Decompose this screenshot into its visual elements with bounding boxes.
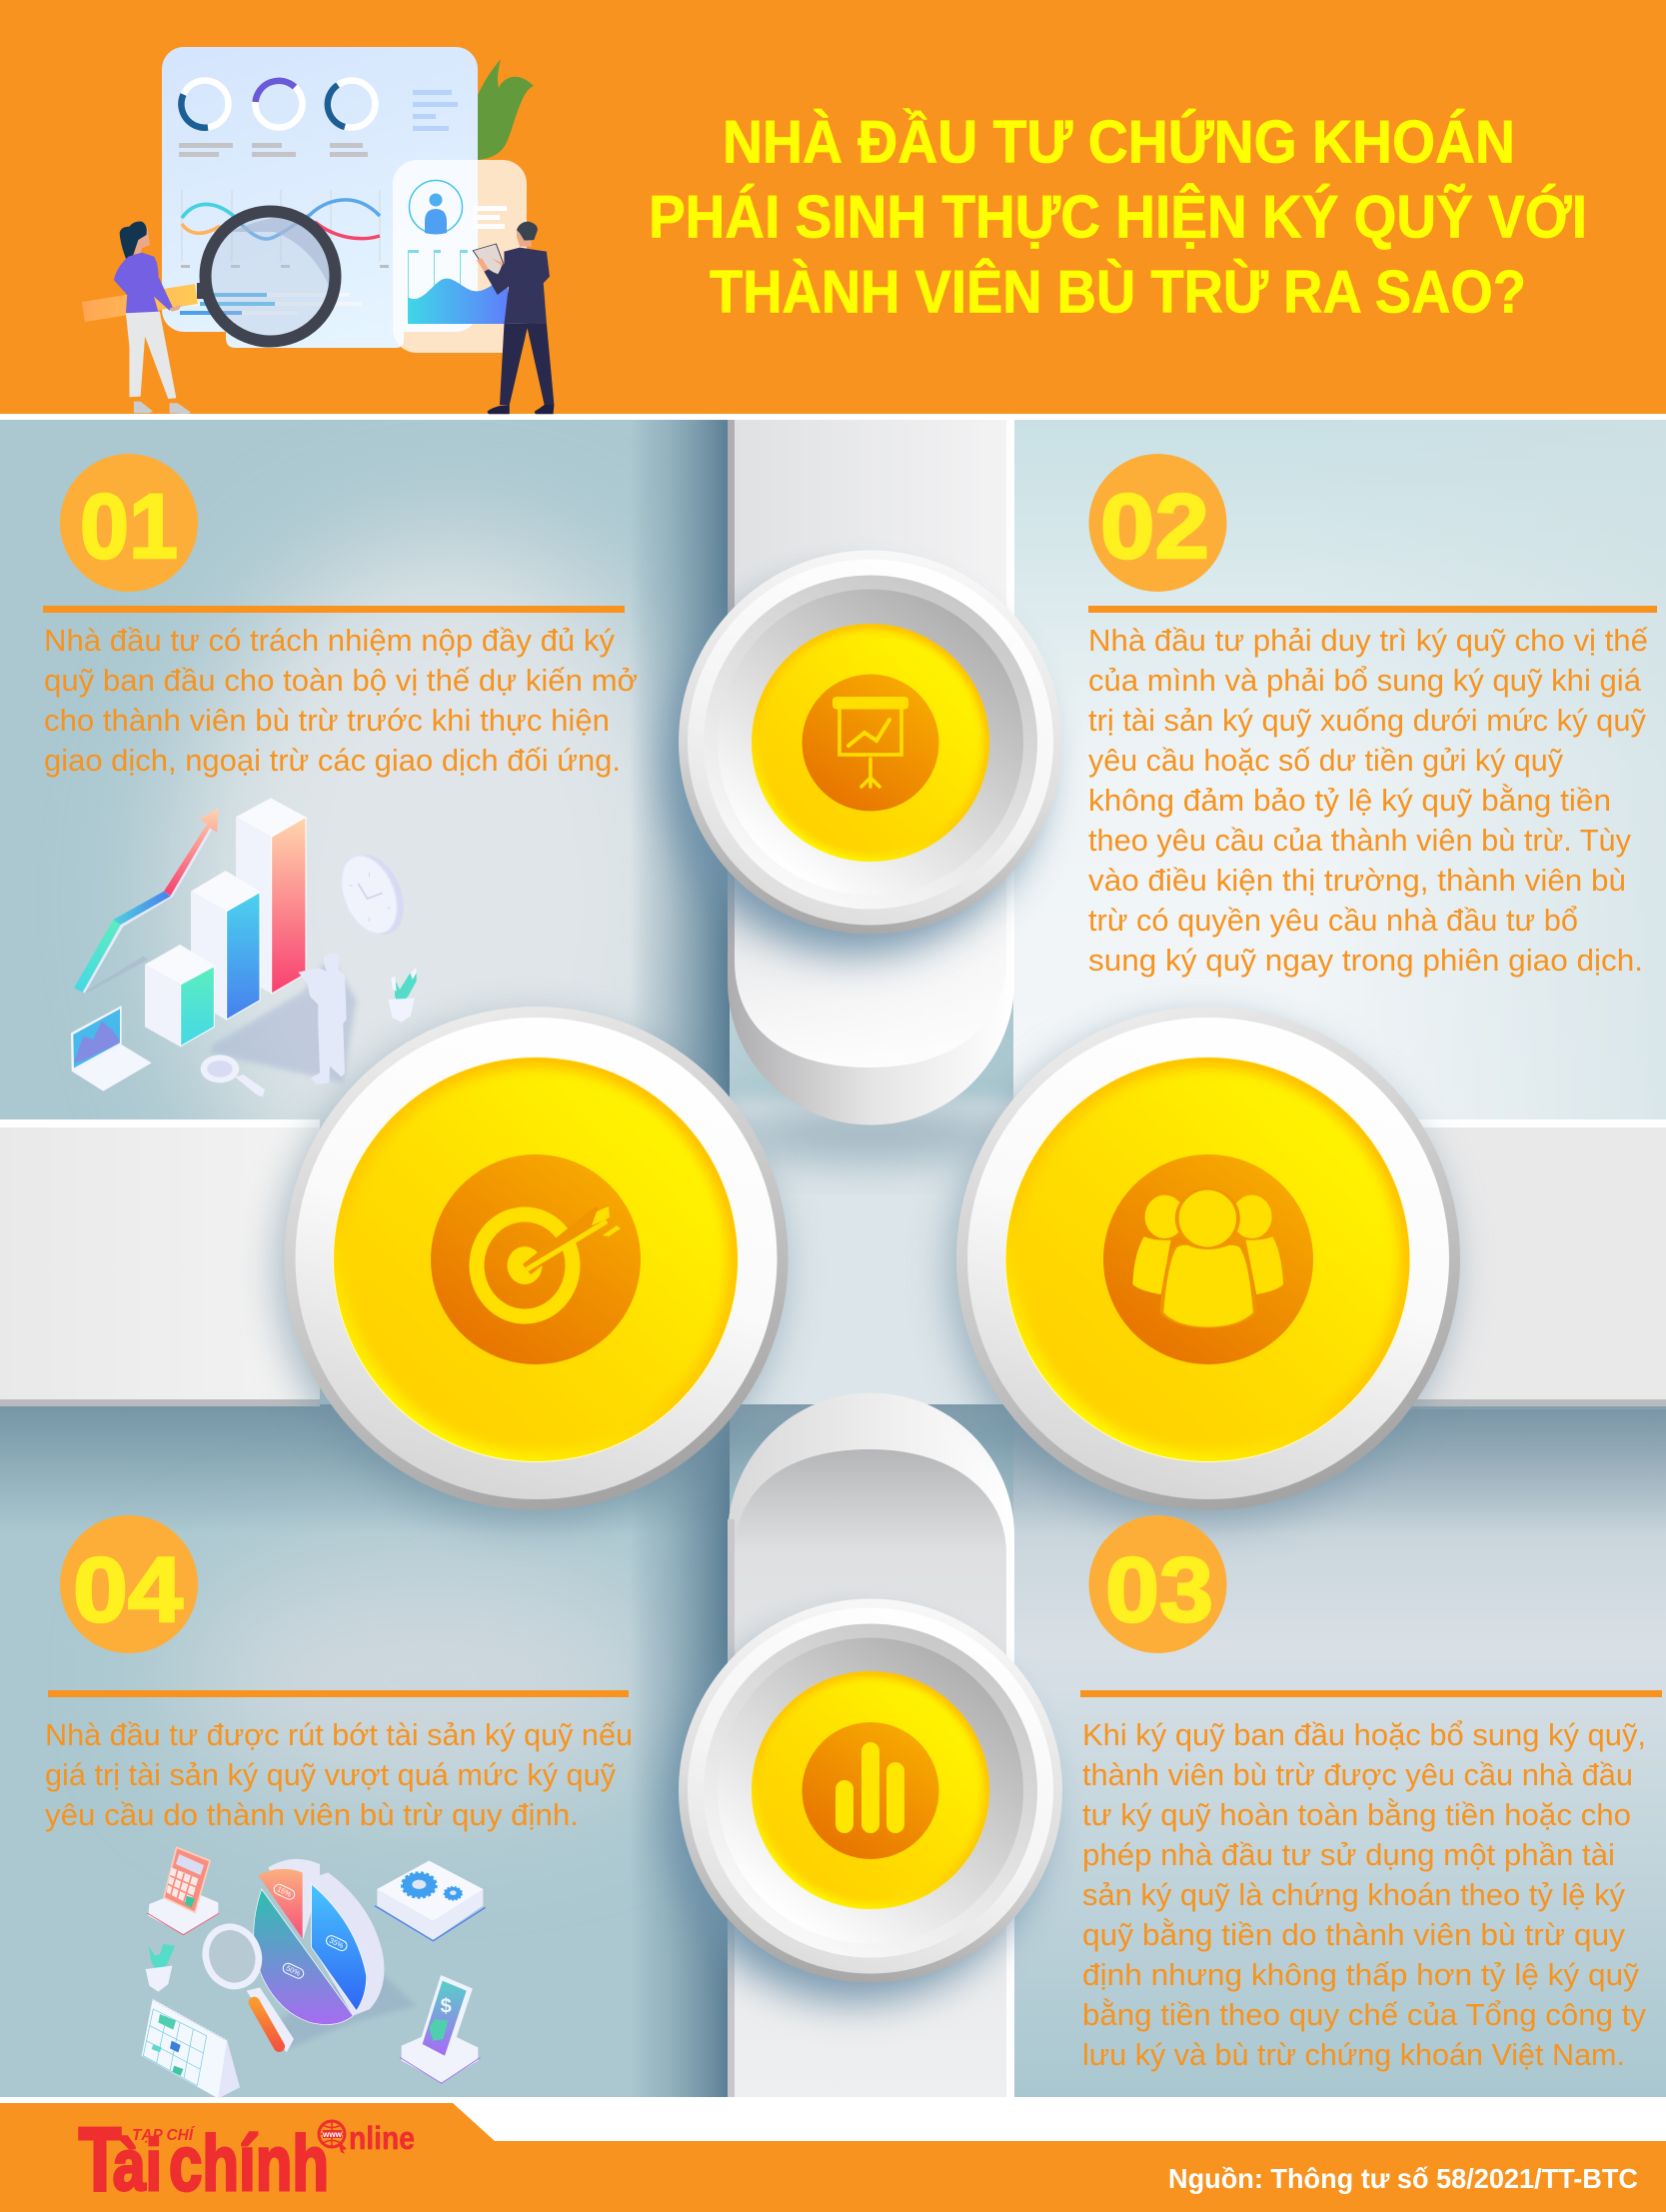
text 02: không đảm bảo tỷ lệ ký quỹ bằng tiền [1088,783,1611,818]
logo: chính [169,2119,329,2207]
pie depth [312,1872,384,2016]
leaf [478,59,534,160]
text 04 [45,1717,633,1832]
text 02 [1088,623,1648,978]
plant [148,1944,175,1974]
icon: three people [1132,1189,1283,1327]
wave lines [182,200,380,239]
text 02: Nhà đầu tư phải duy trì ký quỹ cho vị thế [1088,623,1648,658]
logo: ài [113,2126,162,2206]
logo: nline [349,2120,415,2156]
rule 03 [1080,1690,1662,1697]
magnifier [201,1055,239,1083]
text 01: Nhà đầu tư có trách nhiệm nộp đầy đủ ký [44,623,615,658]
text 02: trị tài sản ký quỹ xuống dưới mức ký quỹ [1088,703,1646,738]
logo: T [79,2109,121,2209]
text 03 [1082,1717,1647,2072]
text 02: sung ký quỹ ngay trong phiên giao dịch. [1088,943,1643,978]
pie slices [258,1869,303,1938]
phone [402,2029,478,2082]
person [298,953,347,1085]
logo [79,2109,415,2209]
text 03: tư ký quỹ hoàn toàn bằng tiền hoặc cho [1082,1797,1631,1832]
text 01: quỹ ban đầu cho toàn bộ vị thế dự kiến mở [44,663,638,698]
text 03: thành viên bù trừ được yêu cầu nhà đầu [1082,1757,1633,1792]
panel: step 03 [1080,1515,1662,2072]
circle: presentation (top) [679,550,1062,934]
magnifier [198,1919,267,1993]
text 02: theo yêu cầu của thành viên bù trừ. Tùy [1088,823,1631,858]
woman figure [114,222,191,414]
title: THÀNH VIÊN BÙ TRỪ RA SAO? [710,258,1526,326]
blue legend lines [413,90,458,131]
vertical bar: bottom [728,1393,1014,2097]
logo: www [322,2130,343,2139]
source: Nguồn: Thông tư số 58/2021/TT-BTC [1168,2163,1638,2194]
circle: bar chart (bottom) [679,1599,1062,1983]
text 04: giá trị tài sản ký quỹ vượt quá mức ký quỹ [45,1757,616,1792]
vertical bar: top [728,420,1014,1125]
calculator [148,1889,218,1934]
icon: presentation board [833,697,908,787]
growth arrow [83,828,212,993]
illustration: pie chart and finance objects: 50% [285,1963,302,1978]
icon: three bars [835,1742,904,1833]
number badge 04 [60,1515,198,1653]
right card [393,160,527,353]
illustration: pie chart and finance objects: 35% [328,1936,346,1950]
text 01: cho thành viên bù trừ trước khi thực hiện [44,703,610,738]
bar 3 [236,817,272,994]
title: PHÁI SINH THỰC HIỆN KÝ QUỸ VỚI [649,184,1587,250]
title [649,108,1587,326]
number badge 03: 03 [1105,1539,1213,1641]
number badge 03 [1089,1515,1227,1653]
text 03: bằng tiền theo quy chế của Tổng công ty [1082,1997,1647,2032]
magnifier [197,283,209,299]
illustration: isometric bar chart [71,798,417,1097]
panel: step 01 [43,454,638,1097]
text 02: trừ có quyền yêu cầu nhà đầu tư bổ [1088,903,1578,938]
gear platform [377,1861,483,1940]
footer [0,2103,1666,2212]
rule 04 [48,1690,629,1697]
text 01 [44,623,638,778]
data bars [180,293,350,297]
clock [335,847,415,943]
panel: step 02 [1088,454,1657,978]
logo: TẠP CHÍ [132,2125,195,2144]
document [162,47,478,348]
icon: bullseye with arrow [477,1206,621,1316]
text 04: yêu cầu do thành viên bù trừ quy định. [45,1797,579,1832]
text 03: quỹ bằng tiền do thành viên bù trừ quy [1082,1917,1626,1952]
text 03: sản ký quỹ là chứng khoán theo tỷ lệ ký [1082,1877,1625,1912]
text 03: định nhưng không thấp hơn tỷ lệ ký quỹ [1082,1957,1640,1992]
circle: target (large left) [284,1007,788,1510]
text 02: của mình và phải bổ sung ký quỹ khi giá [1088,663,1642,698]
panel: step 04 [45,1515,633,2098]
pie percent labels [273,1883,349,1980]
text 03: phép nhà đầu tư sử dụng một phần tài [1082,1837,1615,1872]
grey labels [179,143,368,157]
text 02: yêu cầu hoặc số dư tiền gửi ký quỹ [1088,743,1563,778]
bar 2 [191,892,227,1021]
rule 02 [1088,606,1657,613]
grid [182,190,380,262]
text 02: vào điều kiện thị trường, thành viên bù [1088,863,1626,898]
illustration: pie chart and finance objects: $ [441,1995,452,2017]
number badge 01 [60,454,198,592]
text 01: giao dịch, ngoại trừ các giao dịch đối ứng. [44,743,621,778]
text 03: lưu ký và bù trừ chứng khoán Việt Nam. [1082,2037,1625,2072]
circle: people (large right) [956,1007,1460,1510]
donut charts [181,80,376,128]
text 03: Khi ký quỹ ban đầu hoặc bổ sung ký quỹ, [1082,1717,1646,1752]
header band [0,0,1666,414]
number badge 02: 02 [1100,476,1209,578]
number badge 02 [1089,454,1227,592]
bar shadows [637,420,730,1098]
circle shadows [668,580,1043,956]
panel background [0,420,1666,2099]
horizontal bar: right [1412,1119,1666,1406]
rule 01 [43,606,625,613]
title: NHÀ ĐẦU TƯ CHỨNG KHOÁN [723,108,1515,176]
laptop [71,1006,122,1072]
bar 1 [145,965,181,1047]
illustration: pie chart and finance objects [142,1847,486,2098]
number badge 01: 01 [80,476,178,578]
number badge 04: 04 [73,1539,183,1641]
horizontal bar: left [0,1119,320,1406]
calendar [218,2041,240,2098]
man figure [473,222,554,414]
header illustration [82,47,554,414]
plant [395,968,417,1007]
illustration: pie chart and finance objects: 15% [276,1884,293,1899]
text 04: Nhà đầu tư được rút bớt tài sản ký quỹ nếu [45,1717,633,1752]
